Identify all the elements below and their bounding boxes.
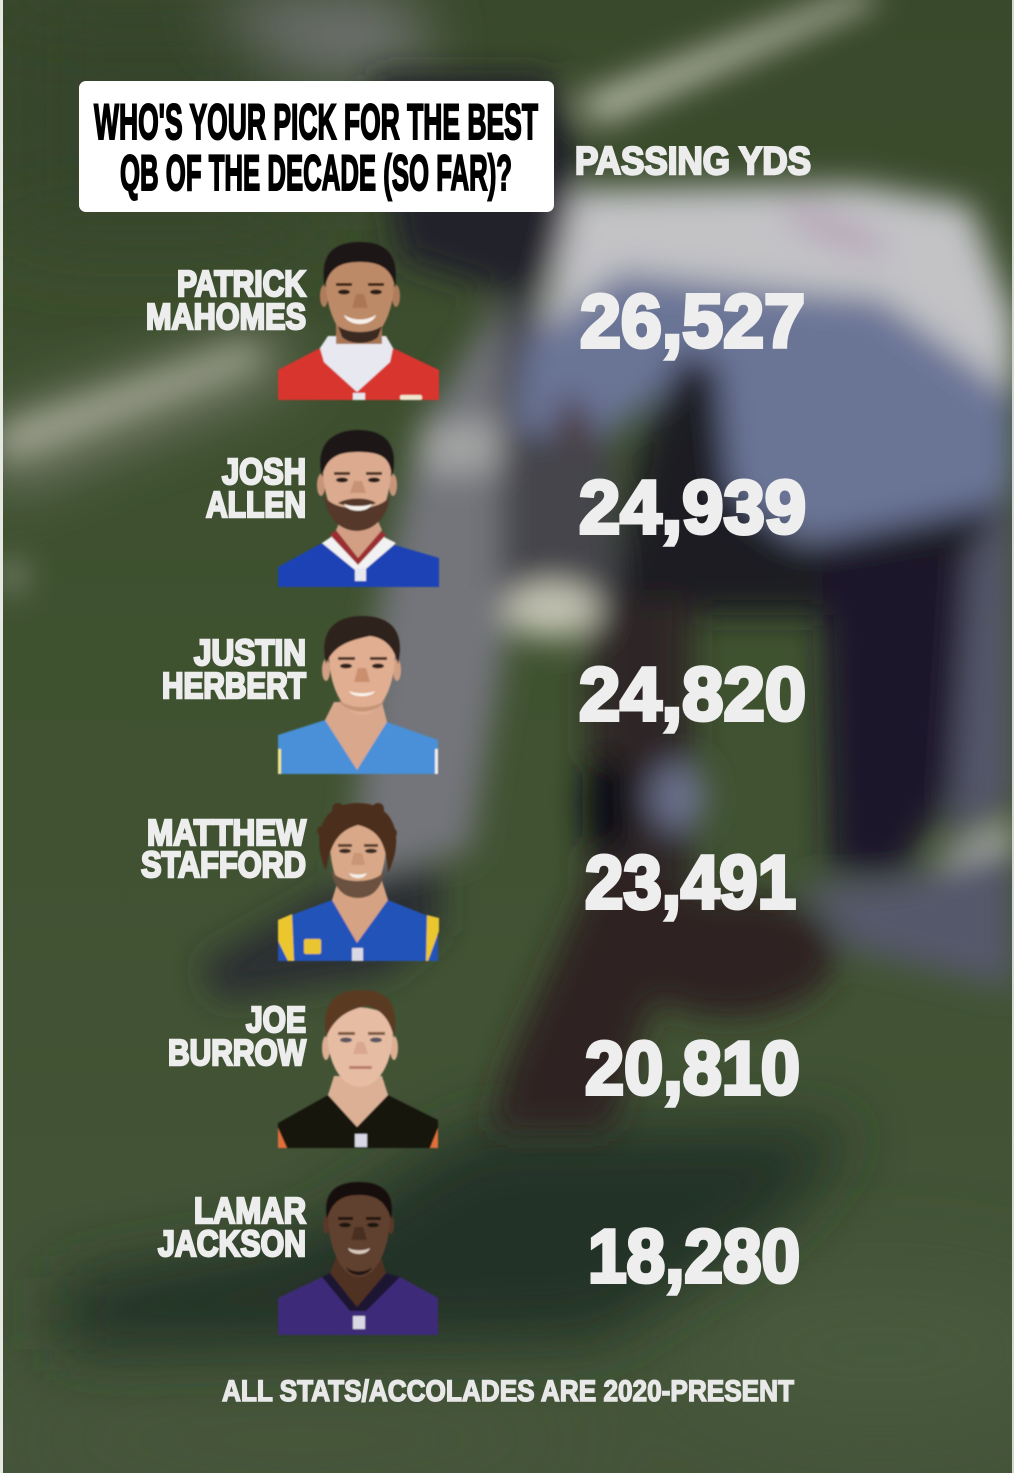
name: Lamar Jackson (158, 1190, 306, 1264)
name: Lamar Jackson: JACKSON (158, 1223, 306, 1264)
stat: Herbert passing yards: 24,820 (579, 652, 806, 736)
name: Josh Allen: JOSH (222, 451, 306, 492)
row: Lamar Jackson (158, 1182, 800, 1335)
footnote: ALL STATS/ACCOLADES ARE 2020-PRESENT (222, 1375, 794, 1408)
portrait: Matthew Stafford (278, 803, 439, 961)
name: Josh Allen (206, 451, 306, 525)
name: Lamar Jackson: LAMAR (194, 1190, 306, 1231)
name: Patrick Mahomes (146, 263, 306, 337)
portrait: Justin Herbert (278, 616, 438, 774)
title box: WHO'S YOUR PICK FOR THE BEST (94, 94, 538, 150)
stat: Stafford passing yards: 23,491 (585, 840, 796, 924)
name: Matthew Stafford: MATTHEW (147, 812, 306, 853)
title box: QB OF THE DECADE (SO FAR)? (120, 145, 512, 201)
name: Josh Allen: ALLEN (206, 484, 306, 525)
name: Matthew Stafford (141, 812, 306, 885)
stat: Mahomes passing yards: 26,527 (580, 279, 805, 363)
name: Patrick Mahomes: PATRICK (177, 263, 306, 304)
portrait: Josh Allen (278, 430, 439, 587)
name: Joe Burrow: BURROW (168, 1032, 306, 1073)
portrait: Patrick Mahomes (278, 242, 439, 400)
name: Joe Burrow (168, 999, 306, 1073)
row: Patrick Mahomes (146, 242, 805, 400)
stat: Jackson passing yards: 18,280 (588, 1214, 800, 1298)
row: Justin Herbert (162, 616, 806, 774)
name: Patrick Mahomes: MAHOMES (146, 296, 306, 337)
row: Matthew Stafford (141, 803, 796, 961)
row: Joe Burrow (168, 990, 800, 1148)
stat: Burrow passing yards: 20,810 (585, 1026, 800, 1110)
portrait: Lamar Jackson (278, 1182, 438, 1335)
name: Joe Burrow: JOE (246, 999, 306, 1040)
column header: passing yards: PASSING YDS (575, 140, 811, 183)
name: Justin Herbert: HERBERT (162, 665, 306, 706)
stat: Allen passing yards: 24,939 (579, 465, 806, 549)
name: Matthew Stafford: STAFFORD (141, 844, 306, 885)
title box (79, 81, 554, 212)
row: Josh Allen (206, 430, 806, 587)
name: Justin Herbert: JUSTIN (194, 632, 306, 673)
portrait: Joe Burrow (278, 990, 438, 1148)
name: Justin Herbert (162, 632, 306, 706)
